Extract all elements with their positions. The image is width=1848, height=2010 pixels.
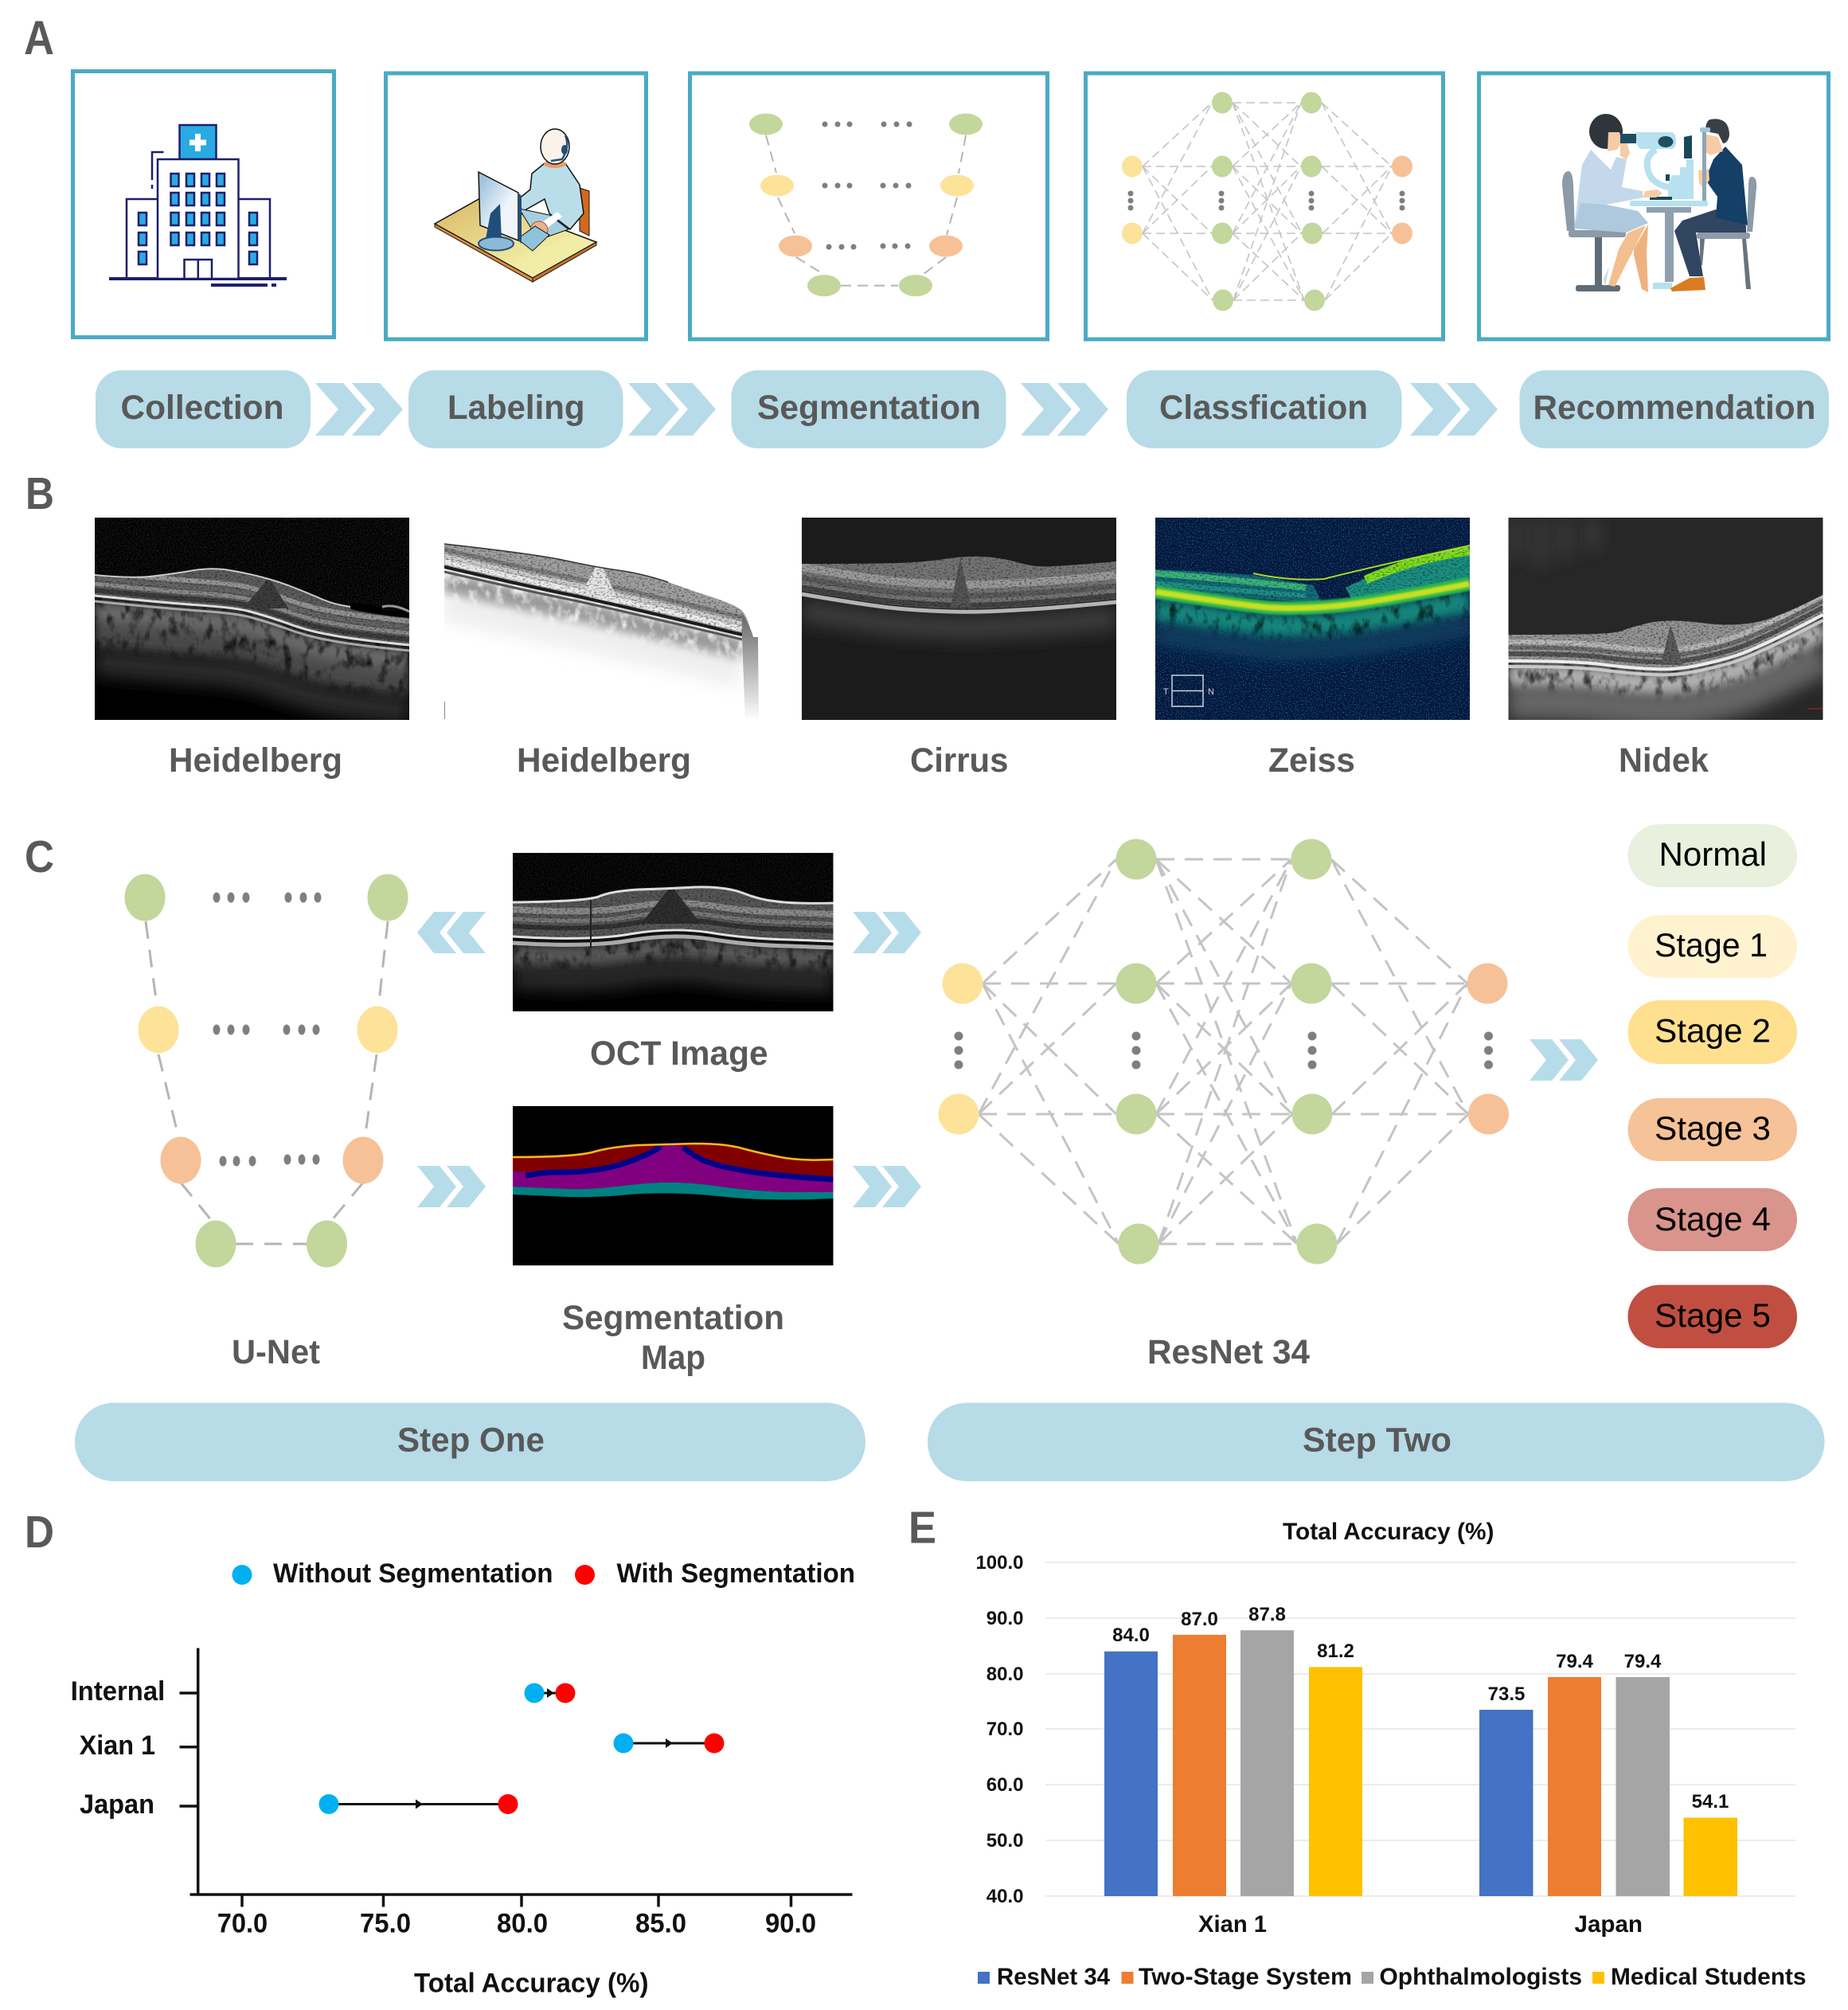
y-axis labels xyxy=(975,1552,1024,1907)
icon: operator at desk xyxy=(435,129,596,282)
x-axis labels: 90.0 xyxy=(765,1908,816,1938)
diagram: ResNet 34 network xyxy=(938,839,1509,1265)
icon: hospital xyxy=(109,125,287,285)
image: Cirrus OCT xyxy=(802,518,1116,720)
label: U-Net: U-Net xyxy=(232,1333,320,1371)
pill: Stage 4 xyxy=(1627,1188,1797,1251)
bar value labels: 79.4 xyxy=(1556,1651,1594,1672)
y-axis labels: Xian 1 xyxy=(80,1730,155,1761)
pill: Stage 2 xyxy=(1627,1000,1797,1064)
label: OCT Image: OCT Image xyxy=(590,1034,768,1073)
dumbbell: Internal xyxy=(524,1683,575,1703)
arrow: OCT to U-Net xyxy=(417,912,486,953)
pill: Stage 1: Stage 1 xyxy=(1655,926,1768,964)
label: Zeiss: Zeiss xyxy=(1268,741,1355,780)
category label: Xian 1: Xian 1 xyxy=(1198,1911,1267,1938)
box: classification xyxy=(1086,73,1443,339)
pill: Stage 1 xyxy=(1627,915,1797,978)
heading: C: C xyxy=(25,831,54,882)
axes xyxy=(180,1648,852,1906)
pill: Stage 5: Stage 5 xyxy=(1655,1296,1771,1334)
diagram: small classification network xyxy=(1122,92,1412,311)
legend: ResNet 34 xyxy=(997,1964,1110,1990)
panel: D dumbbell chart xyxy=(25,1507,855,1999)
bar value labels xyxy=(1112,1604,1729,1813)
label: Segmentation Map: Segmentation xyxy=(562,1299,784,1337)
arrow: ResNet to stages xyxy=(1530,1039,1598,1081)
image: Nidek OCT xyxy=(1508,518,1823,720)
y-axis labels: 60.0 xyxy=(987,1774,1024,1796)
pill: Step Two: Step Two xyxy=(1303,1421,1451,1459)
pill: Step One: Step One xyxy=(397,1421,545,1459)
panel: B device images xyxy=(25,468,1823,780)
y-axis labels: 100.0 xyxy=(975,1552,1024,1574)
pill: Labeling: Labeling xyxy=(447,389,584,427)
box: recommendation xyxy=(1479,73,1828,339)
bar value labels: 79.4 xyxy=(1624,1651,1662,1672)
pill: Normal: Normal xyxy=(1659,835,1767,873)
pill: Classfication xyxy=(1127,370,1401,448)
diagram: small U-Net xyxy=(749,113,983,296)
diagram: U-Net xyxy=(124,874,408,1268)
x-axis labels xyxy=(217,1908,816,1938)
bar value labels: 84.0 xyxy=(1112,1625,1150,1646)
label: Heidelberg: Heidelberg xyxy=(169,741,342,780)
x-axis labels: 70.0 xyxy=(217,1908,268,1938)
arrow: chevrons 3 xyxy=(1021,383,1108,436)
bar value labels: 54.1 xyxy=(1692,1791,1729,1813)
pill: Collection: Collection xyxy=(121,389,283,427)
pill: Step One xyxy=(75,1403,865,1481)
label: Cirrus: Cirrus xyxy=(910,741,1008,780)
x-axis labels: 75.0 xyxy=(360,1908,411,1938)
heading: D: D xyxy=(25,1507,54,1558)
pill: Classfication: Classfication xyxy=(1159,389,1368,427)
y-axis labels: Internal xyxy=(71,1676,165,1707)
image: Zeiss OCT: N xyxy=(1208,687,1214,697)
pill: Segmentation xyxy=(731,370,1006,448)
legend xyxy=(232,1558,855,1589)
y-axis labels xyxy=(71,1676,165,1820)
y-axis labels: 80.0 xyxy=(987,1664,1024,1685)
heading: B: B xyxy=(25,468,54,519)
legend: Medical Students xyxy=(1611,1964,1806,1990)
legend: Two-Stage System xyxy=(1139,1964,1352,1990)
arrow: segmentation map to ResNet xyxy=(853,1166,921,1207)
pill: Stage 3: Stage 3 xyxy=(1655,1109,1771,1147)
arrow: OCT to ResNet xyxy=(853,912,921,953)
pill: Stage 5 xyxy=(1627,1285,1797,1348)
bars: Japan xyxy=(1479,1677,1737,1896)
x-axis labels: 85.0 xyxy=(635,1908,686,1938)
image: Heidelberg OCT xyxy=(95,518,409,720)
x-axis labels: 80.0 xyxy=(497,1908,548,1938)
panel: A workflow xyxy=(24,11,1829,448)
pill: Stage 4: Stage 4 xyxy=(1655,1200,1771,1238)
arrow: chevrons 2 xyxy=(628,383,716,436)
image: Zeiss OCT: T xyxy=(1163,687,1169,697)
bar value labels: 87.0 xyxy=(1181,1609,1218,1630)
pill: Collection xyxy=(96,370,311,448)
chart title: Total Accuracy (%) xyxy=(1283,1519,1494,1545)
y-axis labels: Japan xyxy=(80,1789,154,1820)
category label: Japan: Japan xyxy=(1575,1911,1643,1938)
y-axis labels: 70.0 xyxy=(987,1719,1024,1740)
bar value labels: 87.8 xyxy=(1248,1604,1286,1625)
pill: Recommendation: Recommendation xyxy=(1533,389,1815,427)
image: Zeiss OCT xyxy=(1155,518,1470,720)
bar value labels: 81.2 xyxy=(1317,1640,1354,1662)
image: Heidelberg inverted OCT xyxy=(444,543,759,719)
pill: Labeling xyxy=(408,370,623,448)
arrow: chevrons 4 xyxy=(1410,383,1498,436)
legend: With Segmentation xyxy=(616,1558,855,1589)
arrow: chevrons 1 xyxy=(315,383,403,436)
pill: Recommendation xyxy=(1519,370,1829,448)
image: segmentation map xyxy=(513,1106,833,1265)
pill: Step Two xyxy=(928,1403,1825,1481)
heading: A: A xyxy=(24,11,54,65)
pill: Normal xyxy=(1627,824,1797,887)
panel: E bar chart xyxy=(908,1502,1806,1990)
y-axis labels: 90.0 xyxy=(987,1608,1024,1629)
legend: Without Segmentation xyxy=(273,1558,553,1589)
x-axis title: Total Accuracy (%) xyxy=(414,1969,648,1999)
label: Segmentation Map xyxy=(562,1299,784,1377)
dumbbell: Xian 1 xyxy=(613,1733,725,1754)
label: Nidek: Nidek xyxy=(1619,741,1709,780)
legend xyxy=(978,1964,1806,1990)
image: OCT input xyxy=(513,853,833,1011)
panel: C two-step model xyxy=(25,824,1825,1481)
pill: Stage 2: Stage 2 xyxy=(1655,1011,1771,1050)
y-axis labels: 50.0 xyxy=(987,1830,1024,1852)
pill: Stage 3 xyxy=(1627,1098,1797,1161)
box: labeling xyxy=(385,73,647,339)
box: segmentation xyxy=(690,73,1048,339)
legend: Ophthalmologists xyxy=(1379,1964,1582,1990)
label: Segmentation Map: Map xyxy=(641,1339,705,1377)
box: collection xyxy=(73,72,334,338)
label: Heidelberg second: Heidelberg xyxy=(517,741,691,780)
bars: Xian 1 xyxy=(1104,1630,1362,1896)
y-axis labels: 40.0 xyxy=(987,1886,1024,1907)
pill: Segmentation: Segmentation xyxy=(757,389,981,427)
arrow: U-Net to segmentation map xyxy=(417,1166,486,1207)
dumbbell: Japan xyxy=(318,1794,518,1814)
heading: E: E xyxy=(908,1502,936,1553)
label: ResNet 34: ResNet 34 xyxy=(1147,1333,1310,1371)
icon: eye examination scene xyxy=(1562,114,1756,292)
bar value labels: 73.5 xyxy=(1488,1683,1525,1705)
